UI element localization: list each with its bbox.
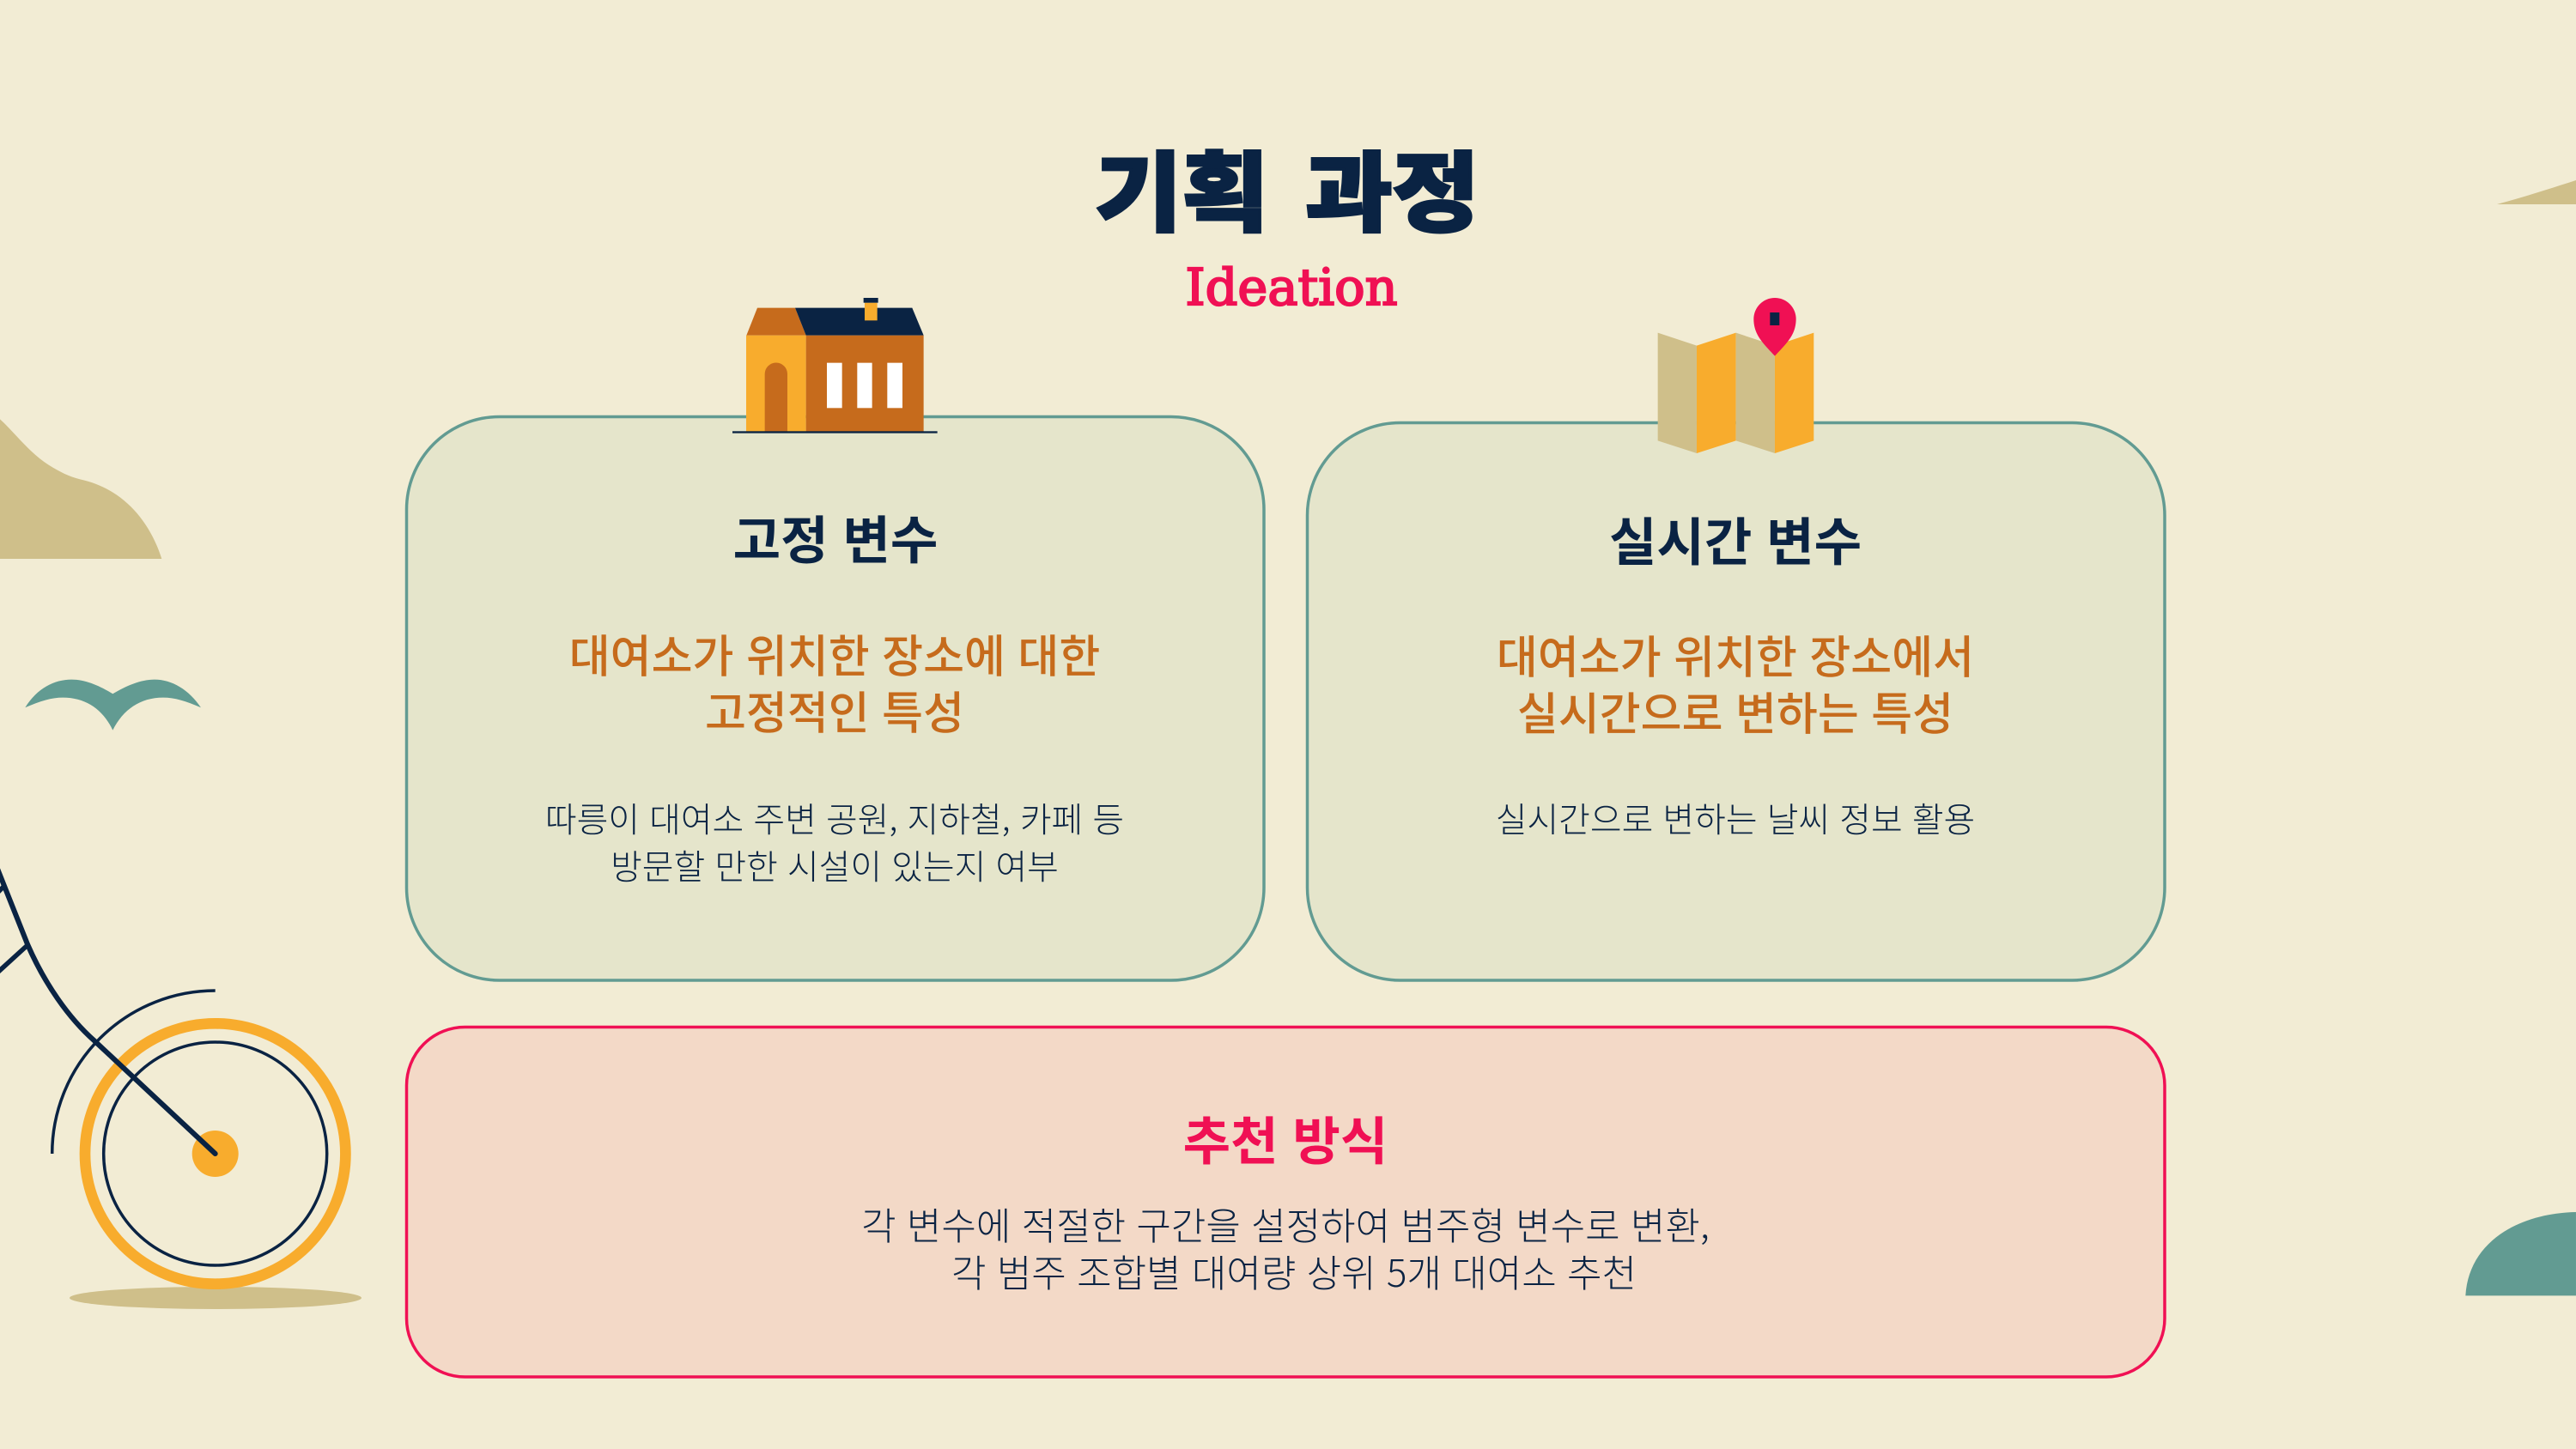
card background — [1307, 422, 2165, 980]
tyre — [85, 1023, 345, 1284]
subheading: fixed variables: 대여소가 위치한 장소에 대한 — [569, 633, 1100, 682]
icon: teal bird — [25, 680, 201, 731]
body text line two: 방문할 만한 시설이 있는지 여부 — [611, 840, 1059, 889]
card background — [407, 1027, 2165, 1377]
icon: house — [732, 298, 938, 433]
card background — [407, 417, 1264, 980]
panel: recommendation method — [407, 1027, 2165, 1377]
mudguard — [52, 991, 216, 1154]
title: 기획 과정 — [1095, 146, 1479, 243]
illustration: bicycle front wheel — [0, 869, 361, 1309]
hub — [192, 1131, 239, 1177]
body text: 실시간으로 변하는 날씨 정보 활용 — [1496, 793, 1975, 842]
rim — [104, 1042, 327, 1265]
icon: folded map with pin — [1658, 298, 1814, 453]
subheading line two: 실시간으로 변하는 특성 — [1517, 690, 1953, 740]
heading: real-time variables: 실시간 변수 — [1609, 513, 1862, 572]
subtitle: Ideation — [1185, 258, 1398, 317]
body text: 각 변수에 적절한 구간을 설정하여 범주형 변수로 변환, — [861, 1196, 1710, 1251]
decoration: tan hill left — [0, 419, 161, 559]
panel: real-time variables — [1307, 422, 2165, 980]
subheading: real-time variables: 대여소가 위치한 장소에서 — [1497, 634, 1974, 683]
heading: recommendation method: 추천 방식 — [1183, 1113, 1388, 1171]
body text line two: 각 범주 조합별 대여량 상위 5개 대여소 추천 — [951, 1243, 1637, 1298]
decoration: tan hill top right — [2497, 180, 2576, 204]
heading: fixed variables: 고정 변수 — [733, 512, 938, 570]
frame branch — [0, 887, 27, 973]
body text: 따릉이 대여소 주변 공원, 지하철, 카페 등 — [545, 793, 1124, 842]
panel: fixed variables — [407, 417, 1264, 980]
wheel ground shadow — [70, 1287, 361, 1309]
frame fork — [0, 869, 216, 1154]
subheading line two: 고정적인 특성 — [705, 689, 964, 739]
decoration: teal hill bottom right — [2465, 1212, 2576, 1295]
